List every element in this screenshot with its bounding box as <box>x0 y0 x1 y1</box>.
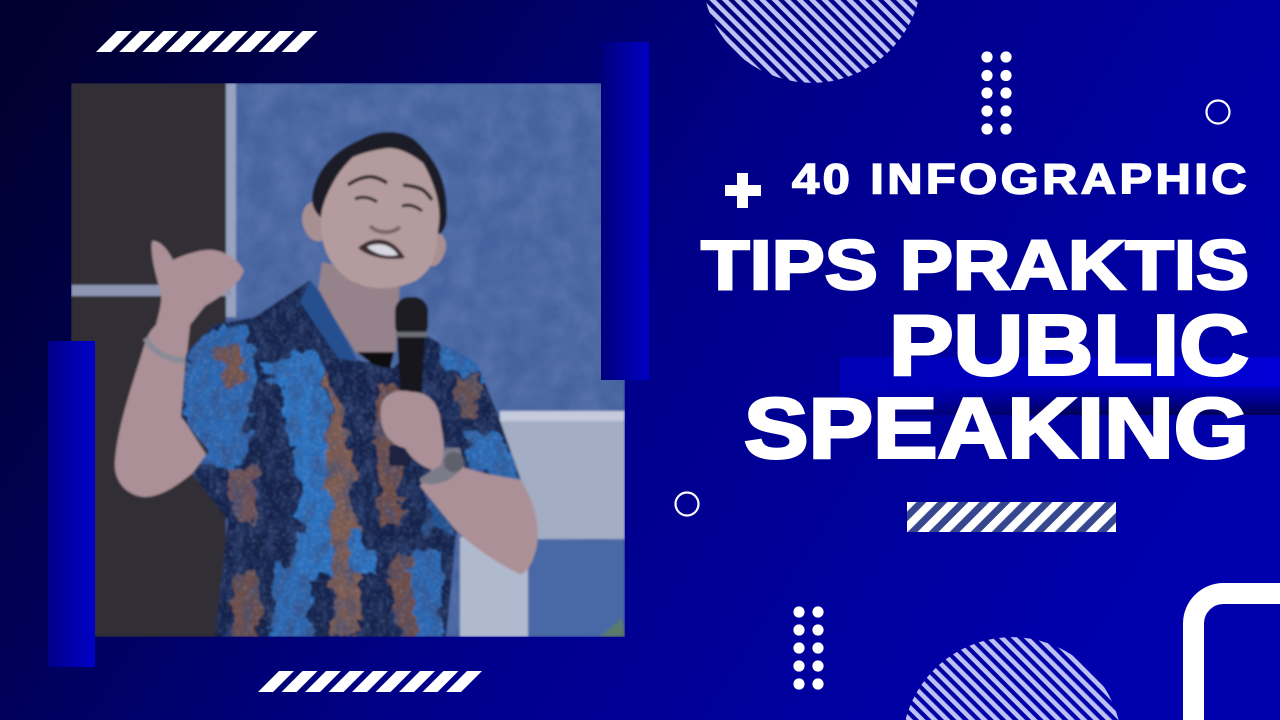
right ear <box>430 232 446 266</box>
striped semicircle: bottom <box>905 637 1119 720</box>
blue bar: left of photo <box>48 341 95 667</box>
photo: speaker with microphone <box>71 83 625 650</box>
photo backdrop <box>71 83 625 637</box>
microphone <box>389 297 428 466</box>
shirt collar <box>300 280 358 362</box>
eyes, brows, nose and mouth <box>348 177 432 259</box>
title <box>701 156 1250 476</box>
blue bar: right of photo <box>601 42 649 380</box>
batik shirt <box>175 275 525 650</box>
bracelet <box>146 338 187 360</box>
title line: public: PUBLIC <box>889 298 1249 394</box>
title line: speaking: SPEAKING <box>744 382 1249 476</box>
hair <box>312 132 447 234</box>
striped semicircle: top <box>705 0 919 83</box>
plant corner <box>600 618 625 637</box>
slanted stripes: top left <box>96 31 318 52</box>
left ear <box>302 202 322 241</box>
rounded square outline: bottom right <box>1194 594 1280 720</box>
wristwatch <box>420 448 464 484</box>
hand gripping microphone <box>381 391 444 470</box>
title line: tips praktis: TIPS PRAKTIS <box>701 226 1249 304</box>
forearm holding microphone <box>420 450 538 574</box>
ring: lower middle <box>676 492 698 516</box>
title line: 40 infographic: 40 INFOGRAPHIC <box>792 156 1250 204</box>
speaker figure <box>115 132 625 650</box>
dot grid: top <box>981 51 1012 135</box>
dot grid: bottom <box>793 606 824 690</box>
plus icon <box>725 173 761 208</box>
ring: top right <box>1206 100 1230 124</box>
raised arm and hand <box>115 241 244 497</box>
slanted stripes: bottom <box>258 671 482 692</box>
undershirt collar <box>357 352 394 369</box>
neck <box>318 262 400 354</box>
head <box>321 148 439 288</box>
hatched rectangle <box>907 502 1116 532</box>
decorative bar behind title <box>840 357 1280 415</box>
